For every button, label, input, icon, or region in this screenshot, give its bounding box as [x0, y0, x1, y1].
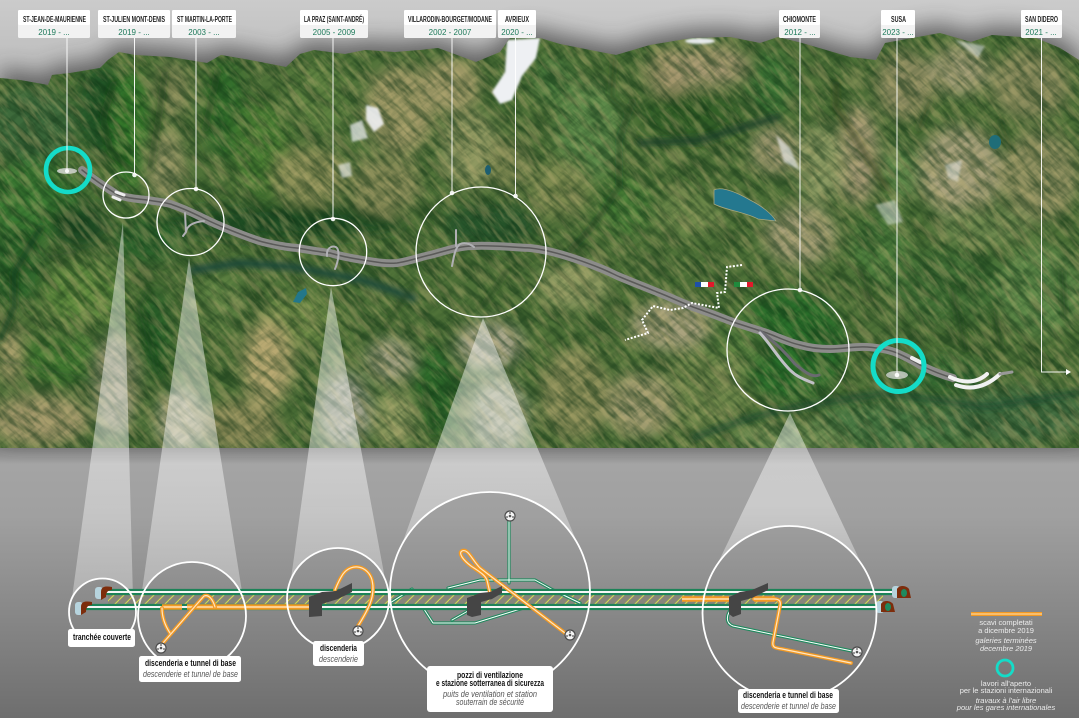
caption: discenderia e tunnel di base, Chiomonte	[738, 689, 839, 713]
label: Chiomonte: 2012 - ...	[784, 28, 816, 37]
label: Saint-Julien-Mont-Denis	[98, 10, 170, 38]
caption: discenderia e tunnel di base	[139, 656, 241, 682]
label: Avrieux: AVRIEUX	[505, 15, 529, 24]
label: San Didero: 2021 - ...	[1025, 28, 1057, 37]
caption: discenderia: descenderie	[319, 654, 358, 664]
valleys and ridge shading	[0, 57, 1079, 437]
panel: 3D terrain map	[0, 0, 1079, 458]
light cone: Villarodin	[401, 318, 579, 547]
label: San Didero	[1021, 10, 1062, 38]
legend text: excavation: galeries terminées	[975, 636, 1037, 645]
tunnel route on map	[82, 170, 1012, 387]
label: Saint-Julien-Mont-Denis: ST-JULIEN MONT-DENIS	[103, 15, 165, 24]
label: Villarodin-Bourget/Modane: 2002 - 2007	[429, 28, 472, 37]
label: Avrieux: 2020 - ...	[501, 28, 533, 37]
schematic green side galleries	[390, 520, 852, 651]
label: La Praz	[300, 10, 368, 38]
portals west	[75, 587, 112, 615]
caption: discenderia: discenderia	[320, 643, 358, 653]
snow patches	[338, 38, 985, 225]
tunnel branch: Saint-Martin-la-Porte	[183, 213, 204, 236]
legend: excavation completed line	[971, 612, 1042, 616]
legend text: excavation: scavi completati	[979, 618, 1033, 627]
legend text: open-air works: travaux à l'air libre	[976, 696, 1036, 705]
label: La Praz: 2005 - 2009	[313, 28, 356, 37]
station: Susa	[873, 340, 924, 392]
top site labels	[18, 10, 1062, 38]
panel: lower grey background	[0, 448, 1079, 718]
white open-air sections at Susa	[950, 374, 987, 382]
label: Chiomonte	[779, 10, 820, 38]
caption: discenderia e tunnel di base: discenderia e tunnel di base	[145, 658, 236, 668]
caption: tranchée couverte	[68, 629, 135, 647]
flag: France	[695, 282, 714, 287]
shaft disks	[155, 510, 863, 658]
panel: upper grey background	[0, 0, 1079, 90]
detail circles	[69, 492, 876, 700]
excavated orange sections on tubes	[162, 599, 775, 607]
label: La Praz: LA PRAZ (SAINT-ANDRÉ)	[304, 15, 364, 24]
legend text: open-air works: per le stazioni internazionali	[960, 686, 1053, 695]
light cone: Saint-Martin-la-Porte	[141, 258, 243, 598]
label: Saint-Jean-de-Maurienne: ST-JEAN-DE-MAURIENNE	[23, 15, 86, 24]
caption: pozzi di ventilazione: e stazione sotterranea di sicurezza	[436, 678, 545, 688]
lakes	[293, 135, 1001, 303]
label: Susa: SUSA	[891, 15, 906, 24]
label: Saint-Jean-de-Maurienne	[18, 10, 90, 38]
hatched space between tubes	[108, 594, 883, 605]
shaft blocks	[309, 583, 768, 617]
station: Saint-Jean-de-Maurienne	[46, 148, 90, 192]
caption: pozzi di ventilazione: souterrain de sécurité	[456, 697, 524, 707]
label: Saint-Jean-de-Maurienne: 2019 - ...	[38, 28, 70, 37]
legend text: excavation	[975, 618, 1037, 653]
caption: discenderia	[313, 641, 364, 666]
legend text: open-air works: pour les gares internationales	[956, 703, 1055, 712]
portals east	[876, 586, 911, 613]
panel: tunnel schematic diagram	[68, 492, 911, 713]
site circles on map	[103, 172, 849, 411]
tunnel branch: La Praz	[327, 247, 338, 269]
caption: pozzi di ventilazione: puits de ventilation et station	[442, 689, 537, 699]
label: Saint-Martin-la-Porte: ST MARTIN-LA-PORTE	[177, 15, 232, 24]
label: Avrieux	[498, 10, 536, 38]
label: Chiomonte: CHIOMONTE	[783, 15, 816, 24]
label: Susa: 2023 - ...	[882, 28, 914, 37]
light cone: Chiomonte	[717, 413, 862, 565]
legend text: open-air works: lavori all'aperto	[981, 679, 1031, 688]
legend text: excavation: decembre 2019	[980, 644, 1033, 653]
label: San Didero: SAN DIDERO	[1025, 15, 1058, 24]
caption: tranchée couverte: tranchée couverte	[73, 632, 131, 642]
caption: pozzi di ventilazione	[427, 666, 553, 712]
arrow: San Didero	[1066, 369, 1071, 375]
terrain shadow	[0, 24, 1079, 439]
map texture	[0, 0, 1079, 448]
flag: Italy	[734, 282, 753, 287]
France–Italy border dotted line	[625, 265, 742, 340]
tunnel branches: Chiomonte	[760, 331, 819, 376]
light cone: tranchée couverte	[72, 222, 133, 598]
label: Villarodin-Bourget/Modane	[404, 10, 496, 38]
legend text: open-air works	[956, 679, 1055, 712]
caption: pozzi di ventilazione: pozzi di ventilazione	[457, 670, 523, 680]
caption: discenderia e tunnel di base: descenderie et tunnel de base	[143, 669, 238, 679]
leader lines and dots	[66, 38, 1066, 377]
light cone: La Praz	[291, 287, 385, 579]
legend: teal ring	[997, 660, 1013, 676]
legend	[956, 614, 1055, 712]
main tubes	[85, 592, 895, 607]
caption: discenderia e tunnel di base, Chiomonte: descenderie et tunnel de base	[741, 701, 836, 711]
label: Saint-Martin-la-Porte	[172, 10, 236, 38]
caption: discenderia e tunnel di base, Chiomonte: discenderia e tunnel di base	[743, 690, 833, 700]
label: Susa	[881, 10, 915, 38]
label: Saint-Julien-Mont-Denis: 2019 - ...	[118, 28, 150, 37]
excavated orange adits	[162, 551, 851, 663]
legend text: excavation: a dicembre 2019	[978, 626, 1034, 635]
tunnel branch: Villarodin-Bourget	[452, 230, 474, 266]
label: Villarodin-Bourget/Modane: VILLARODIN-BOURGET/MODANE	[408, 15, 492, 24]
label: Saint-Martin-la-Porte: 2003 - ...	[188, 28, 220, 37]
